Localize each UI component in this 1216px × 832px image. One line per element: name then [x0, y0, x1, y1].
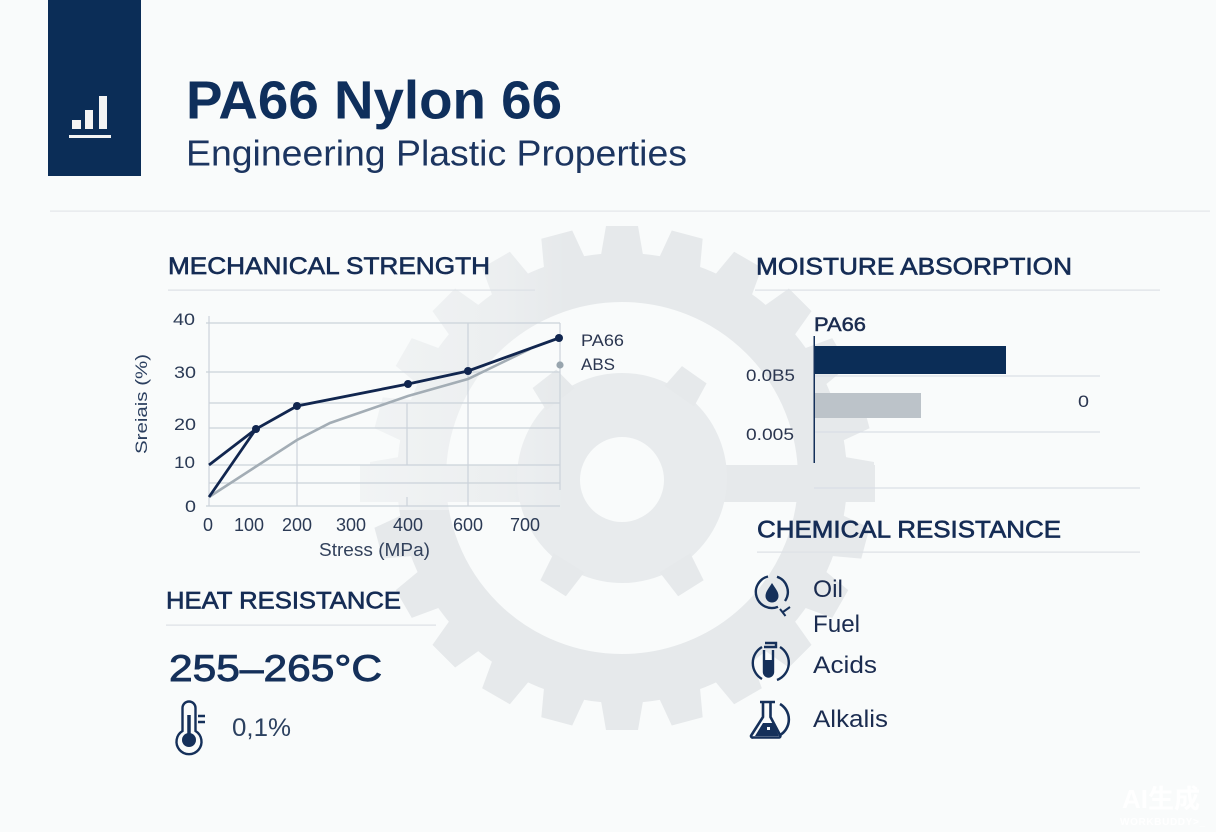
y axis labels: 20: [174, 415, 196, 434]
y axis labels: [173, 310, 196, 516]
icon: bar chart: [69, 96, 111, 138]
bar chart: 0.0B5: [746, 366, 795, 385]
label: acids: Acids: [813, 652, 877, 679]
temperature range: 255–265°C: [169, 648, 382, 689]
x axis labels: 700: [510, 515, 540, 535]
label: oil: Oil: [813, 576, 843, 603]
panel: heat resistance: [166, 588, 436, 754]
legend: [581, 332, 624, 374]
icon: flask: [751, 702, 789, 738]
heading: heat resistance: HEAT RESISTANCE: [166, 588, 401, 614]
label: fuel: Fuel: [813, 611, 860, 638]
series: ABS: [209, 349, 530, 497]
bar chart: 0.005: [746, 425, 794, 444]
subtitle: Engineering Plastic Properties: [186, 132, 687, 174]
label: alkalis: Alkalis: [813, 706, 888, 733]
heading: chemical resistance: CHEMICAL RESISTANCE: [757, 516, 1061, 544]
y axis labels: 10: [174, 453, 195, 472]
x axis title: Stress (MPa): [319, 540, 430, 560]
x axis labels: 200: [282, 515, 312, 535]
y axis labels: 0: [185, 497, 196, 516]
value: 0,1%: [232, 714, 291, 742]
x axis labels: 300: [336, 515, 366, 535]
heading: mechanical strength: MECHANICAL STRENGTH: [168, 253, 490, 280]
icon: test tube: [753, 643, 789, 680]
bar: ABS: [815, 393, 921, 418]
heading: moisture absorption: MOISTURE ABSORPTION: [756, 254, 1072, 280]
x axis labels: 600: [453, 515, 483, 535]
line chart: [132, 310, 624, 560]
bar: PA66: [815, 346, 1006, 374]
x axis labels: 400: [393, 515, 423, 535]
y axis labels: 30: [174, 363, 196, 382]
legend: PA66: [581, 332, 624, 350]
bar label: PA66: [814, 315, 866, 336]
legend: ABS: [581, 356, 615, 374]
panel: moisture absorption: [746, 254, 1160, 488]
x axis labels: 0: [203, 515, 213, 535]
panel: mechanical strength: [132, 253, 624, 560]
x axis labels: [203, 515, 540, 535]
watermark: AI生成: [1122, 784, 1200, 814]
icon: thermometer: [176, 702, 205, 754]
x axis labels: 100: [234, 515, 264, 535]
header block with bar icon: [48, 0, 141, 176]
watermark: WORKBUDDY>_: [1120, 817, 1205, 828]
bar chart: 0: [1078, 392, 1089, 411]
icon: oil drop: [756, 576, 790, 616]
y axis title: Sreiais (%): [132, 354, 151, 454]
background gear watermark: [360, 226, 875, 730]
y axis labels: 40: [173, 310, 195, 329]
title: PA66 Nylon 66: [186, 70, 562, 130]
bar chart: [746, 315, 1140, 488]
panel: chemical resistance: [751, 516, 1140, 738]
series: PA66: [209, 334, 563, 497]
watermark: [1120, 784, 1205, 828]
